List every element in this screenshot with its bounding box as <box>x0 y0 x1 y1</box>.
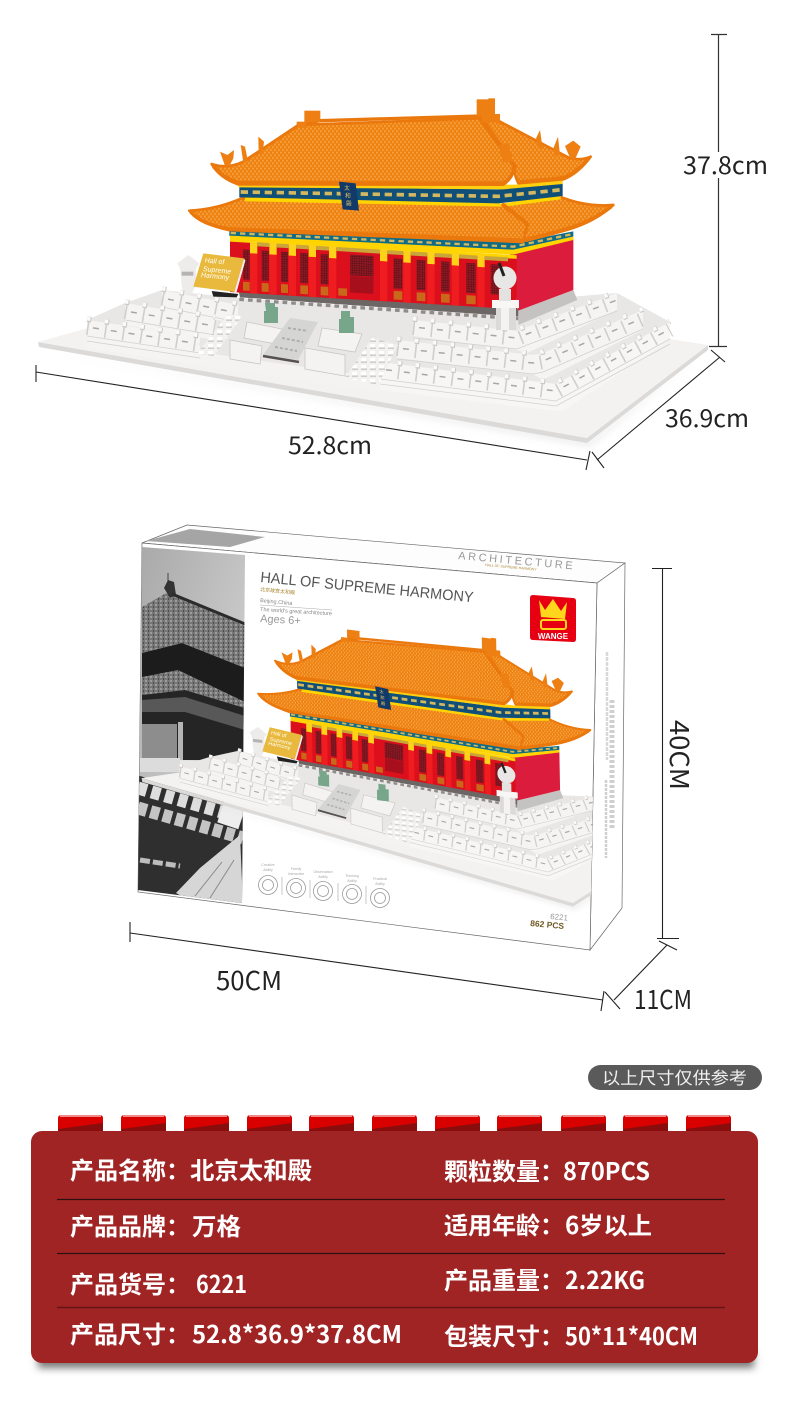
row: piece count: 颗粒数量： <box>444 1152 564 1187</box>
row: package size <box>444 1317 698 1352</box>
name plaque: 和 <box>345 191 351 200</box>
box title: HALL OF SUPREME HARMONY <box>260 569 474 606</box>
feature icons: Ability <box>347 879 357 883</box>
middle terrace wall left <box>125 302 215 340</box>
box side face <box>590 563 625 950</box>
lower eave edge <box>191 207 611 240</box>
row: brand: 万格 <box>192 1207 241 1242</box>
gold sign board <box>193 253 245 297</box>
feature icons: Family <box>291 867 301 871</box>
box front face <box>138 543 597 950</box>
specification panel <box>31 1131 758 1363</box>
lower roof right slope <box>503 196 613 241</box>
depth dimension: 36.9cm <box>592 350 749 468</box>
feature icons: Ability <box>318 875 328 879</box>
red side wall <box>510 238 573 311</box>
lower terrace wall right <box>380 320 670 412</box>
lower roof front slope <box>189 198 527 242</box>
row: product name: 北京太和殿 <box>190 1151 312 1186</box>
row: item number: 6221 <box>196 1265 247 1300</box>
box title: Ages 6+ <box>260 613 301 627</box>
lower frieze <box>229 230 573 255</box>
feature icons: Ability <box>375 882 385 886</box>
side step <box>518 290 577 325</box>
hall building <box>177 98 613 325</box>
terrace mass <box>87 290 670 412</box>
sundial pillar <box>492 263 519 330</box>
row: piece count: 870PCS <box>563 1152 650 1187</box>
row: product size: 产品尺寸： <box>70 1315 190 1350</box>
lower terrace wall left <box>87 318 200 365</box>
row: weight <box>444 1261 645 1296</box>
centre front wall <box>200 352 380 392</box>
row: product size: 52.8*36.9*37.8CM <box>192 1315 402 1350</box>
WANGE logo: WANGE <box>538 632 569 641</box>
box depth dimension: 11CM: 11CM <box>634 980 692 1017</box>
row: product name <box>70 1151 312 1186</box>
reference note pill: 以上尺寸仅供参考 <box>602 1064 747 1089</box>
red front facade <box>230 238 517 309</box>
stone floor strip <box>238 289 518 319</box>
row: item number: 产品货号： <box>70 1265 190 1300</box>
upper yellow eave band <box>238 179 563 189</box>
central carved ramp <box>263 318 318 362</box>
roof finials <box>220 98 581 166</box>
box title: Beijing,China <box>260 598 294 607</box>
middle terrace wall right <box>397 308 643 380</box>
box top face <box>142 525 625 583</box>
left stairs <box>197 314 242 356</box>
row: age: 适用年龄： <box>444 1206 564 1241</box>
feature icons: Thinking <box>345 874 359 878</box>
jade lion left <box>264 303 278 323</box>
row: product size <box>70 1315 402 1350</box>
box top face: ARCHITECTURE <box>458 550 576 573</box>
row: piece count <box>444 1152 650 1187</box>
box item number and piece count: 6221 <box>550 912 569 923</box>
height dimension: 37.8cm: 37.8cm <box>683 146 768 181</box>
centre balustrades <box>230 322 362 376</box>
box item number and piece count: 862 PCS <box>530 918 565 931</box>
row: age: 6岁以上 <box>565 1206 652 1241</box>
upper terrace wall right <box>413 292 617 353</box>
feature icons: Practical <box>373 877 387 881</box>
feature icons: Interactive <box>288 872 304 876</box>
box height dimension: 40CM: 40CM <box>662 720 699 790</box>
WANGE logo <box>530 595 576 642</box>
box model picture <box>142 630 593 909</box>
brick studs <box>58 1115 731 1133</box>
height dimension: 37.8cm <box>683 34 768 346</box>
feature icons: Creative <box>261 863 275 867</box>
box title: 北京故宫太和殿 <box>260 586 295 596</box>
width dimension: 52.8cm: 52.8cm <box>288 426 372 461</box>
black and white photo panel <box>138 547 245 903</box>
box title: The world's great architecture <box>260 607 332 617</box>
box width dimension: 50CM <box>130 922 604 1011</box>
feature icons: Observation <box>313 870 333 874</box>
roof ridges <box>244 116 527 224</box>
row: brand: 产品品牌： <box>70 1207 190 1242</box>
name plaque: 殿 <box>346 198 352 207</box>
upper eave edge <box>213 158 589 183</box>
gold sign board: Hall of <box>204 257 225 266</box>
name plaque <box>339 182 359 211</box>
row: weight: 2.22KG <box>565 1261 645 1296</box>
gold sign board: Harmony <box>200 272 230 282</box>
upper blue frieze <box>239 183 563 203</box>
row: package size: 50*11*40CM <box>565 1317 698 1352</box>
depth dimension: 36.9cm: 36.9cm <box>665 399 749 434</box>
width dimension: 52.8cm <box>36 365 590 470</box>
box title <box>260 569 474 627</box>
upper roof front slope <box>212 118 515 185</box>
feature icons: Ability <box>263 868 273 872</box>
row: package size: 包装尺寸： <box>444 1317 564 1352</box>
feature icons <box>258 863 390 908</box>
upper terrace wall left <box>162 288 238 324</box>
base plate <box>38 328 708 446</box>
panel shadow <box>38 1352 754 1368</box>
jade lion right <box>339 311 354 333</box>
box depth dimension: 11CM <box>605 941 692 1017</box>
left stone lantern <box>177 255 199 294</box>
box width dimension: 50CM: 50CM <box>216 961 282 998</box>
row: weight: 产品重量： <box>444 1261 564 1296</box>
box item number and piece count <box>530 912 569 931</box>
upper roof right slope <box>480 118 591 183</box>
product box <box>130 525 668 950</box>
hall model with terrace base <box>38 98 708 446</box>
right stairs <box>345 338 398 385</box>
upper yellow band <box>245 195 561 207</box>
row: item number <box>70 1265 247 1300</box>
gold sign board: Supreme <box>202 266 232 276</box>
box height dimension: 40CM <box>652 568 699 938</box>
row: product name: 产品名称： <box>70 1151 190 1186</box>
row: age <box>444 1206 652 1241</box>
box top face: HALL OF SUPREME HARMONY <box>485 563 537 572</box>
name plaque: 太 <box>344 183 350 192</box>
